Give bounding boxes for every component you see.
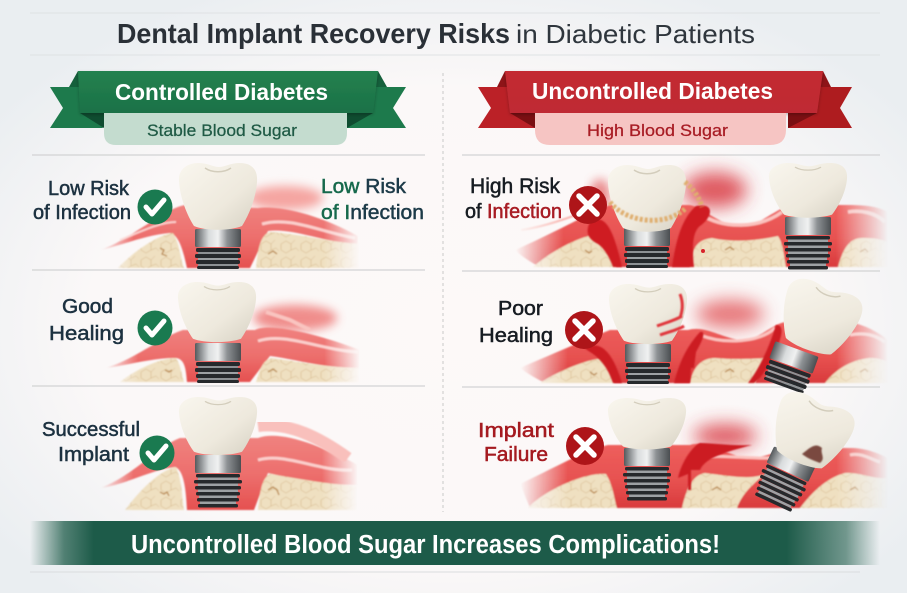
label: low risk of infection <box>33 178 131 224</box>
title: Dental Implant Recovery Risks <box>117 18 510 49</box>
check icon <box>138 310 172 346</box>
label: poor healing: Poor <box>498 297 543 320</box>
footer banner: Uncontrolled Blood Sugar Increases Complications! <box>131 531 720 559</box>
label: low risk of infection repeated <box>321 175 424 224</box>
illustration: healthy implant <box>100 163 360 269</box>
label: high risk of infection <box>465 175 562 223</box>
illustration: healing implant <box>105 282 360 383</box>
panel: uncontrolled row 3 implant failure <box>478 386 888 514</box>
cross icon <box>565 311 603 349</box>
subtitle: high blood sugar <box>535 113 786 145</box>
title: in Diabetic Patients <box>516 19 755 49</box>
illustration: failed implants <box>520 386 888 514</box>
label: good healing: Good <box>62 295 113 318</box>
label: successful implant: Implant <box>58 444 129 466</box>
illustration: successful implant <box>100 397 358 510</box>
label: implant failure: Implant <box>478 420 555 442</box>
illustration: infected implants <box>515 163 888 270</box>
label: implant failure <box>478 420 555 466</box>
red ribbon <box>478 71 852 128</box>
panel: controlled diabetes header <box>50 71 406 145</box>
label: good healing <box>49 295 124 345</box>
check icon <box>140 436 174 470</box>
panel: uncontrolled row 2 poor healing <box>479 274 888 394</box>
panel: controlled row 2 good healing <box>49 282 360 383</box>
label: implant failure: Failure <box>484 444 548 466</box>
illustration: poorly healing implants <box>520 274 888 394</box>
label: poor healing: Healing <box>479 324 553 347</box>
label: high risk of infection: High Risk <box>470 175 560 198</box>
panel: uncontrolled row 1 high risk of infection <box>465 163 888 270</box>
label: good healing: Healing <box>49 322 124 345</box>
red ribbon: Uncontrolled Diabetes <box>532 78 773 104</box>
subtitle: high blood sugar: High Blood Sugar <box>587 121 728 140</box>
cross icon <box>566 427 604 465</box>
check icon <box>138 190 172 224</box>
label: low risk of infection: of Infection <box>33 202 131 224</box>
title <box>30 13 880 55</box>
label: successful implant: Successful <box>42 419 140 441</box>
label: low risk of infection repeated: of Infection <box>321 201 424 224</box>
panel: controlled row 1 low risk of infection <box>33 163 424 269</box>
green ribbon <box>50 71 406 128</box>
panel: uncontrolled diabetes header <box>478 71 852 145</box>
label: successful implant <box>42 419 140 466</box>
cross icon <box>569 186 607 224</box>
subtitle: stable blood sugar <box>104 113 347 145</box>
label: poor healing <box>479 297 553 347</box>
label: high risk of infection: of Infection <box>465 201 562 223</box>
green ribbon: Controlled Diabetes <box>115 79 328 105</box>
label: low risk of infection: Low Risk <box>48 178 130 200</box>
subtitle: stable blood sugar: Stable Blood Sugar <box>147 121 297 140</box>
panel: controlled row 3 successful implant <box>42 397 358 510</box>
footer banner <box>30 521 880 572</box>
label: low risk of infection repeated: Low Risk <box>321 175 407 198</box>
